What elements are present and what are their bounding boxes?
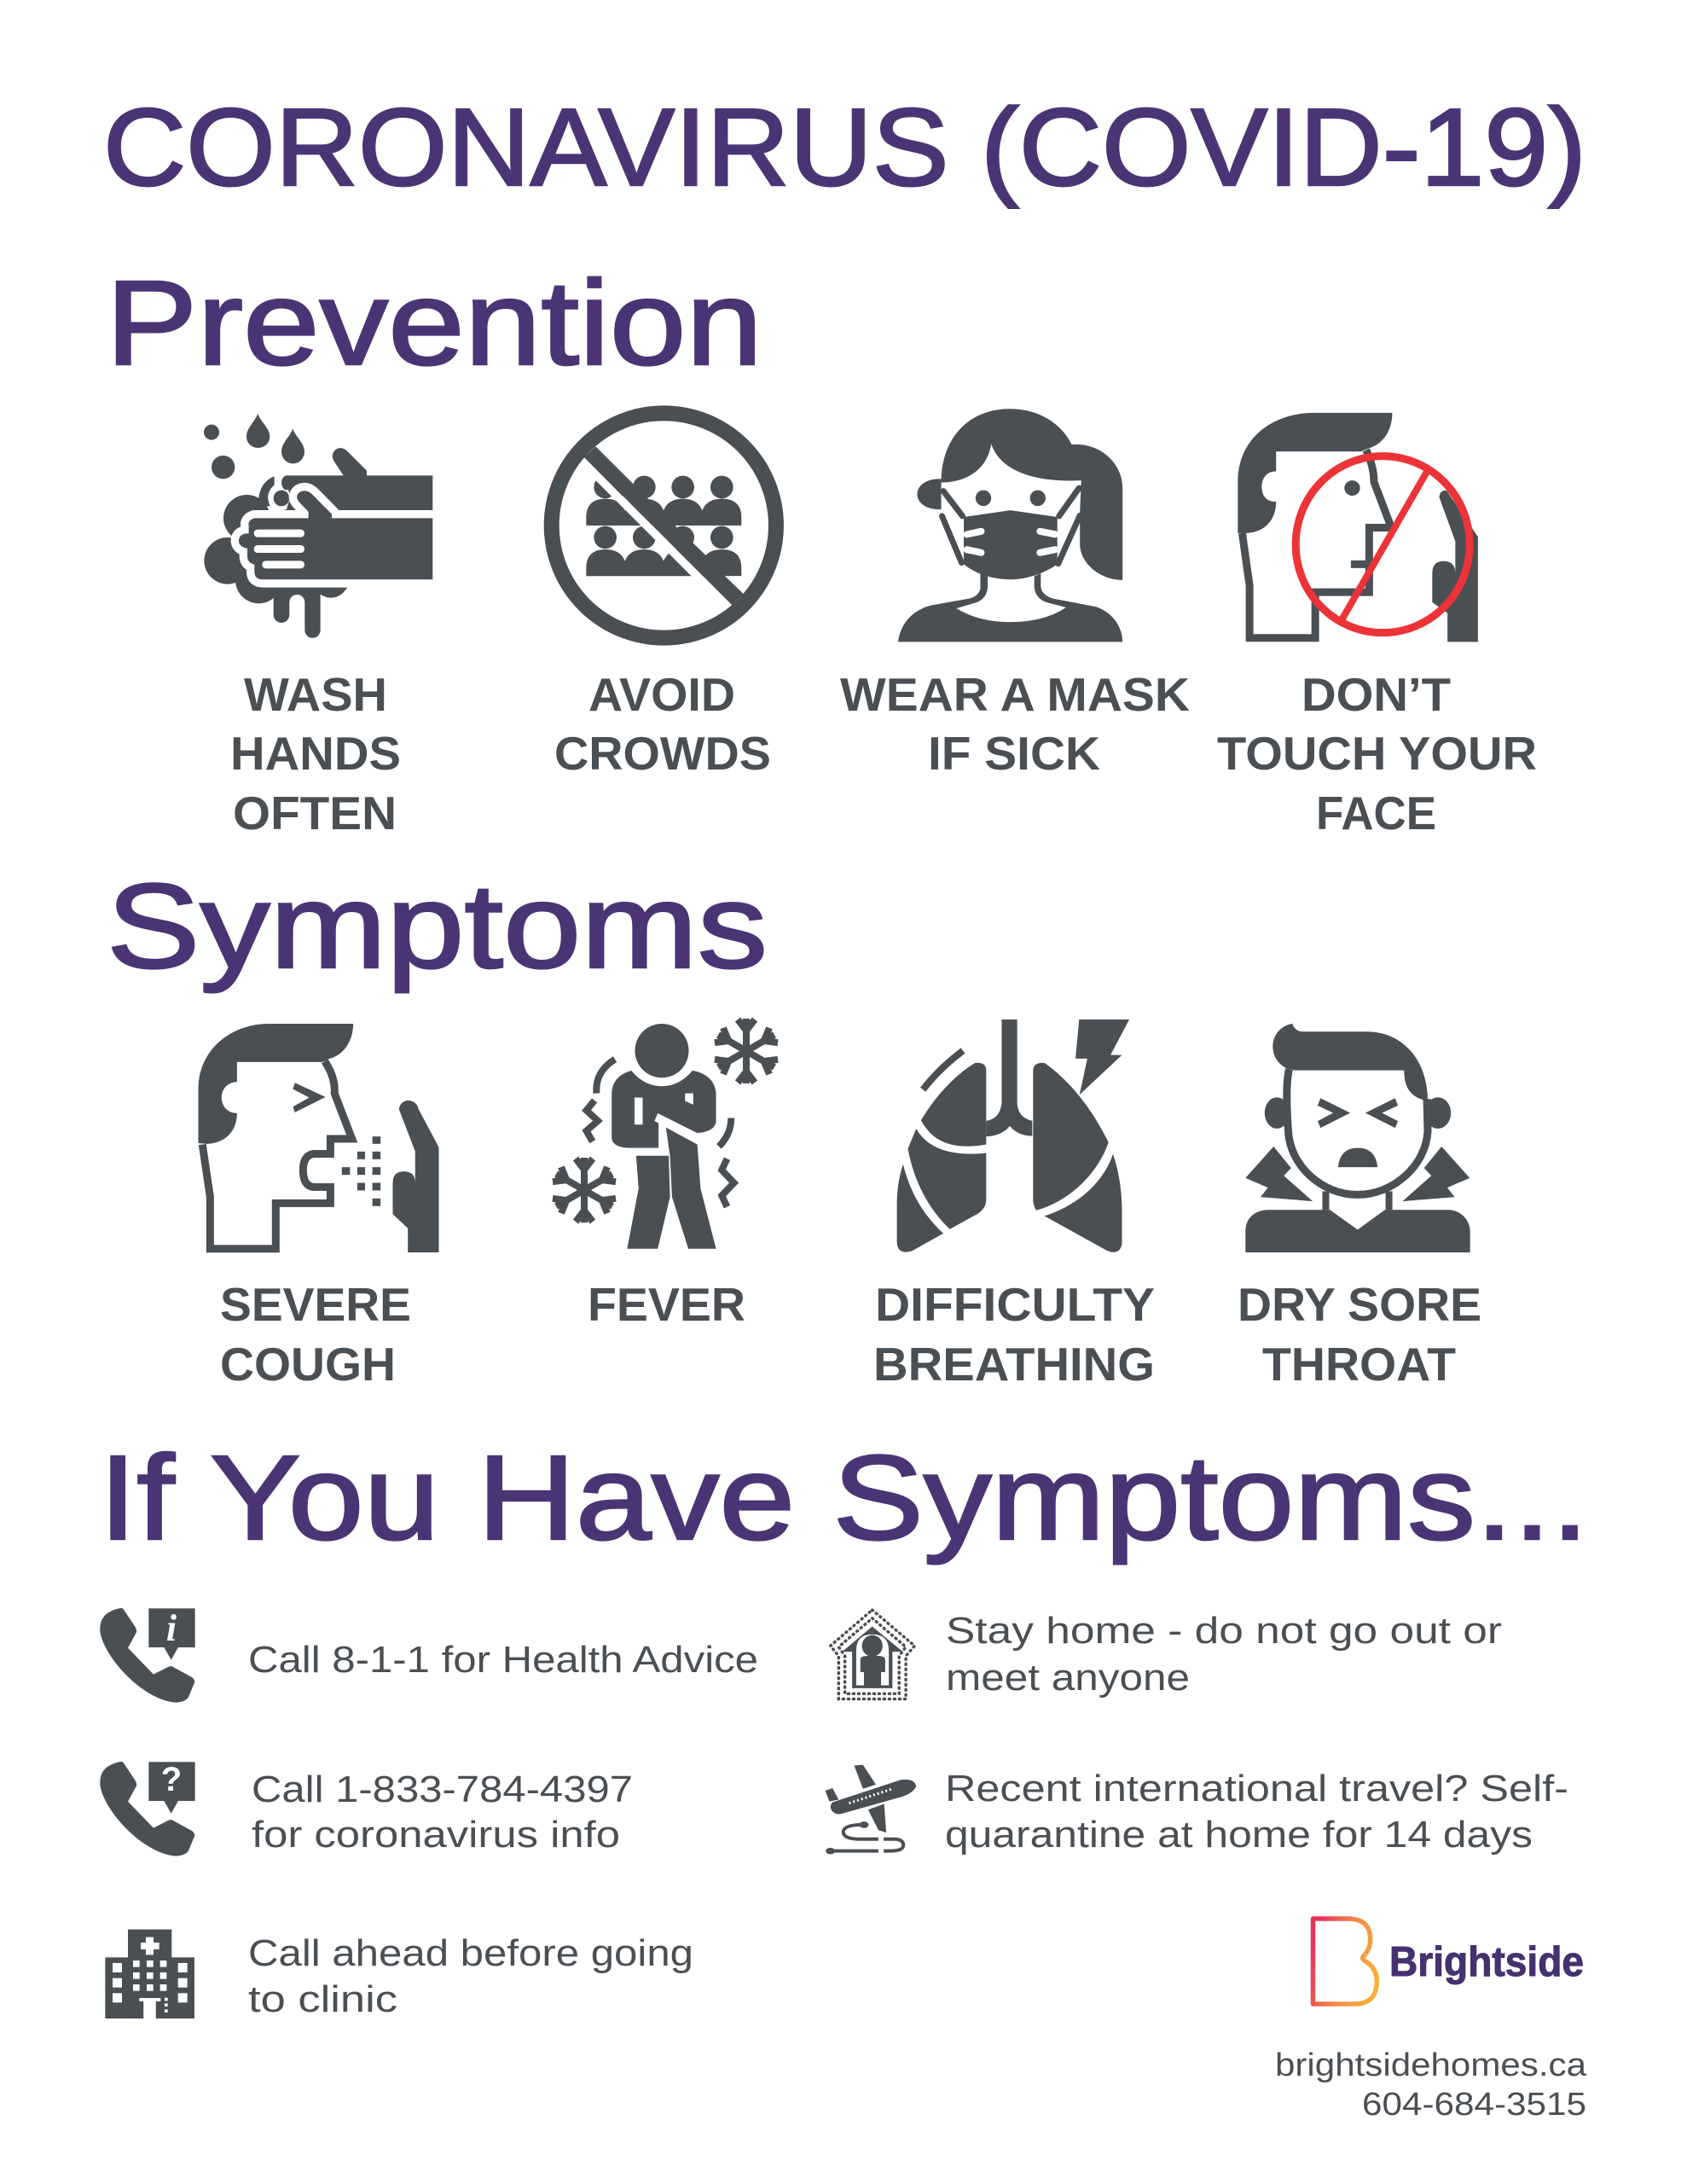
icon: hospital bbox=[105, 1930, 194, 2019]
heading: prevention: Prevention bbox=[106, 255, 762, 390]
label: don't touch your face: TOUCH YOUR bbox=[1217, 727, 1537, 780]
text: call ahead bbox=[248, 1932, 693, 2020]
label: don't touch your face: FACE bbox=[1316, 787, 1436, 839]
label: wash hands often bbox=[230, 668, 401, 839]
text: recent travel: quarantine at home for 14 days bbox=[945, 1814, 1533, 1856]
text: stay home: meet anyone bbox=[946, 1657, 1190, 1699]
contact details: brightsidehomes.ca bbox=[1275, 2048, 1587, 2083]
text: stay home bbox=[946, 1610, 1502, 1699]
label: don't touch your face: DON’T bbox=[1301, 668, 1451, 721]
text: call 811: Call 8-1-1 for Health Advice bbox=[248, 1639, 758, 1681]
icon: avoid crowds bbox=[552, 413, 776, 638]
label: severe cough bbox=[220, 1278, 411, 1391]
icon: phone question: ? bbox=[161, 1761, 182, 1798]
icon: phone info bbox=[100, 1607, 195, 1703]
icon: wash hands bbox=[204, 414, 432, 638]
heading: if you have symptoms: If You Have Symptoms... bbox=[99, 1430, 1589, 1565]
icon: stay home bbox=[831, 1610, 914, 1699]
label: severe cough: COUGH bbox=[220, 1338, 396, 1391]
heading: symptoms: Symptoms bbox=[107, 858, 768, 993]
label: dry sore throat: THROAT bbox=[1262, 1338, 1456, 1391]
panel: symptoms items bbox=[199, 1019, 1481, 1391]
logo: brightside bbox=[1313, 1919, 1584, 2004]
icon: sore throat bbox=[1245, 1024, 1470, 1252]
label: wash hands often: OFTEN bbox=[233, 787, 397, 839]
label: avoid crowds: AVOID bbox=[588, 668, 735, 721]
icon: severe cough bbox=[199, 1024, 439, 1252]
label: don't touch your face bbox=[1217, 668, 1537, 839]
label: fever: FEVER bbox=[588, 1278, 745, 1331]
label: severe cough: SEVERE bbox=[220, 1278, 411, 1331]
label: wear a mask if sick: WEAR A MASK bbox=[840, 668, 1190, 721]
label: difficulty breathing bbox=[873, 1278, 1155, 1391]
label: wash hands often: WASH bbox=[244, 668, 387, 721]
label: wear a mask if sick bbox=[840, 668, 1190, 780]
icon: do not touch face bbox=[1238, 413, 1478, 642]
label: avoid crowds bbox=[554, 668, 771, 780]
text: stay home: Stay home - do not go out or bbox=[946, 1610, 1502, 1652]
contact details bbox=[1275, 2048, 1587, 2123]
icon: airplane bbox=[826, 1765, 916, 1854]
text: call coronavirus line: Call 1-833-784-4397 bbox=[252, 1769, 633, 1810]
panel: prevention items bbox=[204, 409, 1537, 839]
label: difficulty breathing: BREATHING bbox=[873, 1338, 1155, 1391]
label: avoid crowds: CROWDS bbox=[554, 727, 771, 780]
icon: phone info: i bbox=[166, 1607, 177, 1649]
label: dry sore throat: DRY SORE bbox=[1238, 1278, 1481, 1331]
title: CORONAVIRUS (COVID-19) bbox=[103, 86, 1586, 209]
text: call ahead: to clinic bbox=[248, 1978, 397, 2020]
label: dry sore throat bbox=[1238, 1278, 1481, 1391]
label: difficulty breathing: DIFFICULTY bbox=[875, 1278, 1155, 1331]
contact details: 604-684-3515 bbox=[1362, 2087, 1586, 2123]
icon: phone question bbox=[100, 1761, 195, 1856]
icon: wear a mask bbox=[898, 409, 1122, 642]
text: recent travel: Recent international travel? Self- bbox=[945, 1768, 1568, 1809]
text: call coronavirus line bbox=[252, 1769, 633, 1856]
icon: lungs bbox=[897, 1019, 1129, 1252]
text: recent travel bbox=[945, 1768, 1568, 1856]
label: wash hands often: HANDS bbox=[230, 727, 401, 780]
logo: brightside: Brightside bbox=[1389, 1939, 1584, 1985]
icon: fever bbox=[552, 1019, 779, 1249]
text: call ahead: Call ahead before going bbox=[248, 1932, 693, 1974]
label: wear a mask if sick: IF SICK bbox=[928, 727, 1100, 780]
text: call coronavirus line: for coronavirus info bbox=[252, 1814, 620, 1856]
panel: actions bbox=[100, 1607, 1568, 2020]
